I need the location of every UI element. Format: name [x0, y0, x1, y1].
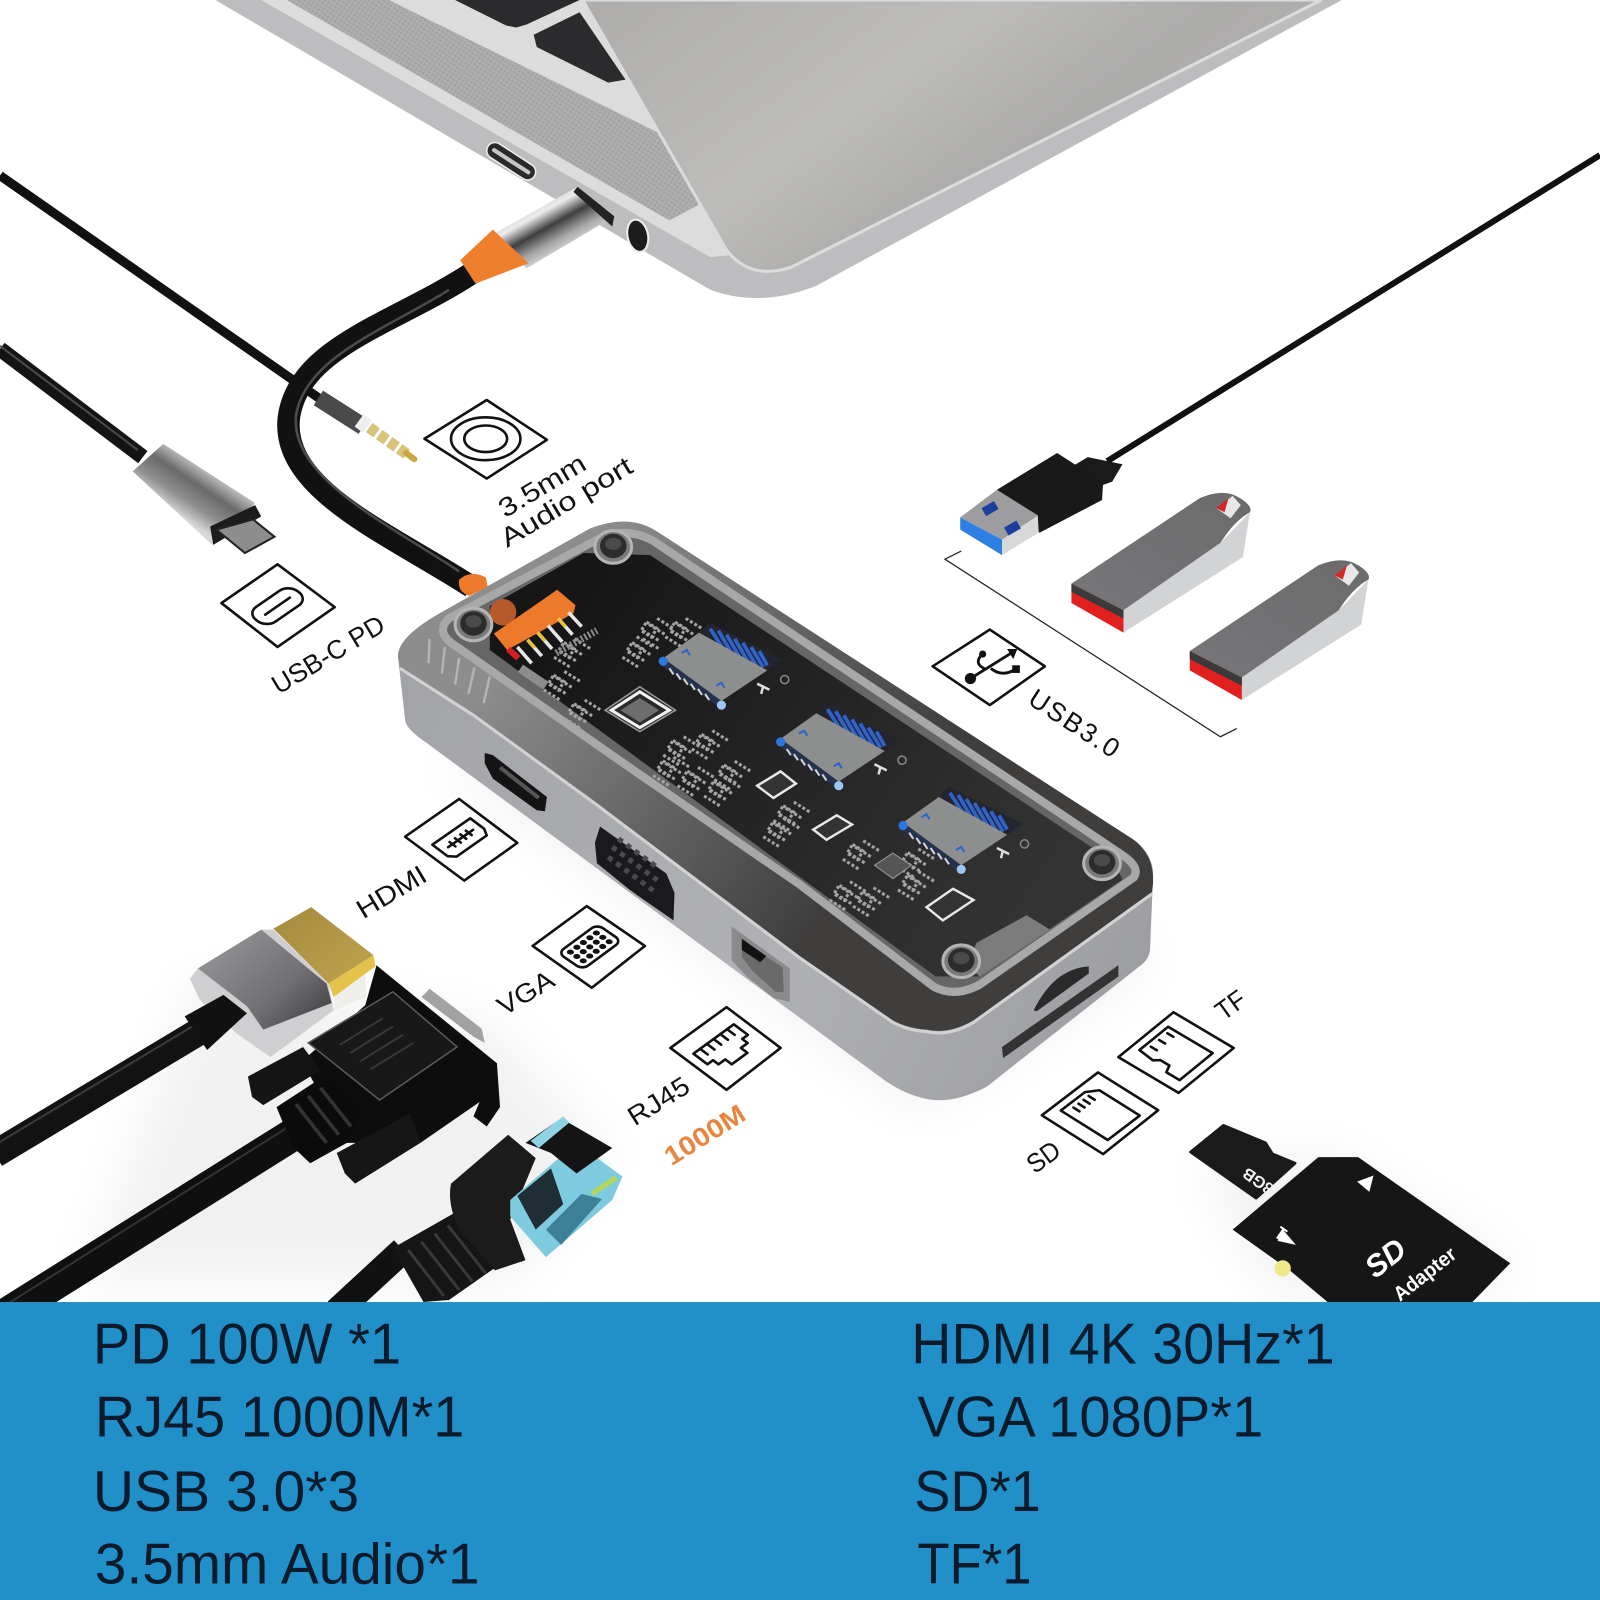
label: usb-c pd: USB-C PD: [266, 609, 390, 700]
label: tf: TF: [1209, 984, 1252, 1026]
screws: [455, 531, 1120, 978]
icon: hdmi: [405, 799, 517, 881]
label: 1000m: 1000M: [659, 1098, 751, 1171]
laptop usb-c port: [484, 139, 539, 183]
label: rj45: RJ45: [622, 1070, 695, 1132]
label: usb3.0: USB3.0: [1023, 683, 1125, 764]
laptop plug: [460, 187, 614, 284]
icon: sd: [1042, 1072, 1158, 1154]
pcb board: [490, 553, 1122, 977]
usb port 2: [776, 703, 906, 790]
rim highlight: [400, 668, 1152, 1033]
audio cable and jack: [0, 176, 414, 459]
laptop deck: [261, 0, 731, 257]
spec: usb: USB 3.0*3: [93, 1460, 359, 1524]
hdmi plug: [0, 907, 376, 1154]
spec: hdmi: HDMI 4K 30Hz*1: [911, 1312, 1335, 1376]
orange connector: [490, 590, 582, 663]
icon: audio: [424, 400, 547, 479]
spec: sd: SD*1: [914, 1460, 1041, 1524]
micro sd card: 8GB: [1239, 1164, 1277, 1198]
label: 3.5mm: 3.5mm: [493, 448, 591, 524]
adapter word: Adapter: [1390, 1243, 1461, 1306]
spec: tf: TF*1: [917, 1533, 1032, 1597]
orange cable collar: [459, 574, 488, 596]
usb bracket line: [945, 551, 1237, 737]
spec: audio: 3.5mm Audio*1: [95, 1533, 480, 1597]
icon: vga: [533, 906, 645, 988]
laptop: [215, 0, 1342, 298]
label: vga: VGA: [492, 964, 560, 1021]
label: hdmi: HDMI: [351, 859, 432, 925]
speaker mesh: [287, 0, 702, 220]
micro sd card: [1191, 1126, 1295, 1198]
laptop audio jack: [624, 218, 651, 254]
tf slot: [1034, 966, 1089, 1011]
hub top face: [398, 522, 1153, 1031]
laptop lid: [583, 0, 1321, 271]
spec: rj45: RJ45 1000M*1: [95, 1386, 464, 1450]
rj45 port: [732, 927, 790, 1002]
sd adapter card: 1: [1271, 1222, 1291, 1245]
hdmi port: [485, 753, 547, 811]
main chip: [605, 687, 676, 732]
hub side wall: [398, 522, 1153, 1100]
icon: tf: [1118, 1012, 1234, 1093]
spec: vga: VGA 1080P*1: [917, 1386, 1263, 1450]
label: sd: SD: [1021, 1135, 1066, 1179]
rj45 plug: [337, 1116, 622, 1311]
icon: usb-c: [221, 564, 335, 647]
usb port 1: [659, 622, 789, 710]
glass frame: [443, 533, 1136, 992]
sd logo: SD: [1358, 1232, 1413, 1285]
usb flash drive 2: [1190, 560, 1369, 700]
vent lines: [429, 639, 490, 703]
soft shadows: [82, 755, 1520, 1296]
usb-c pd cable and plug: [0, 346, 274, 553]
icon: rj45: [670, 1007, 781, 1090]
spec band: [0, 1302, 1600, 1600]
spec: pd: PD 100W *1: [93, 1312, 401, 1376]
usb flash drive 1: [1071, 493, 1251, 633]
vga port: [595, 827, 674, 920]
sd slot: [1002, 965, 1118, 1058]
hub body: [398, 522, 1153, 1100]
hub cable: [288, 273, 471, 587]
label: audio port: Audio port: [495, 450, 639, 553]
sd adapter card: [1233, 1157, 1510, 1306]
laptop base: [215, 0, 1342, 298]
usb-a plug: [960, 155, 1600, 555]
circuit details: [520, 618, 1050, 977]
keyboard keys: [455, 0, 626, 83]
vga plug: [0, 965, 500, 1324]
usb port 3: [898, 787, 1029, 874]
icon: usb: [933, 630, 1045, 705]
